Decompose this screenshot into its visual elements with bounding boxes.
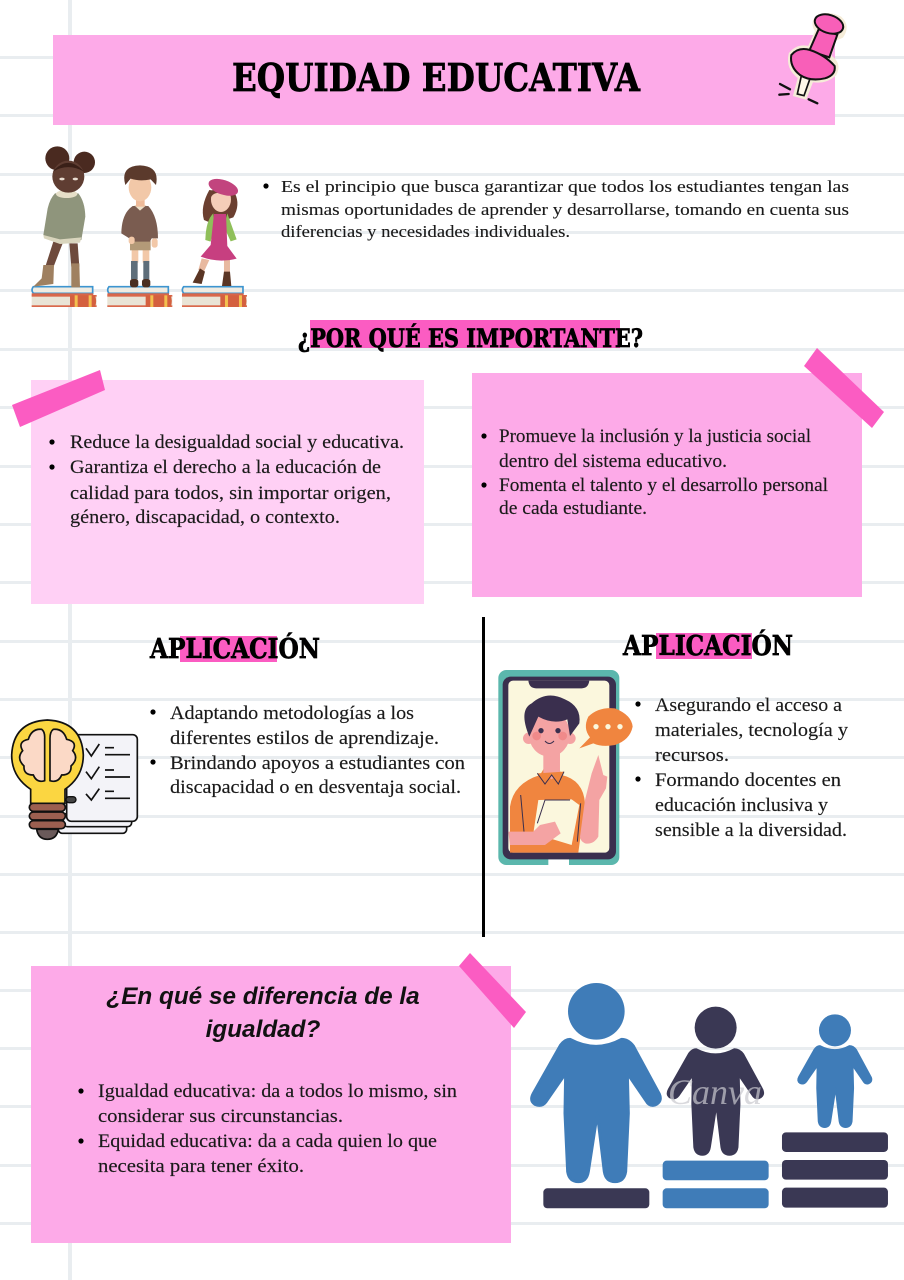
list: igualdad y equidad — [78, 1082, 457, 1177]
heading: aplicacion right: APLICACIÓN — [622, 628, 793, 662]
icon: push pin — [779, 11, 846, 103]
list: aplicacion left — [150, 704, 465, 798]
child 2 — [107, 165, 172, 307]
icon: teacher on smartphone — [498, 670, 633, 866]
heading: aplicacion left: APLICACIÓN — [149, 631, 320, 665]
list: aplicacion left: Brindando apoyos a estudiantes con — [170, 754, 465, 774]
list: reasons right: Fomenta el talento y el desarrollo personal — [499, 476, 828, 496]
figure 2 — [668, 1007, 763, 1155]
child 1 — [32, 146, 97, 307]
tape: left — [12, 370, 105, 427]
list: aplicacion right: Asegurando el acceso a — [655, 696, 842, 716]
list: reasons left: Reduce la desigualdad social y educativa. — [70, 433, 404, 453]
list: aplicacion left: diferentes estilos de aprendizaje. — [170, 729, 439, 749]
chart: figures of equity on stacked steps — [532, 983, 888, 1208]
list: aplicacion left: Adaptando metodologías a los — [170, 704, 414, 724]
panel: diferencia con la igualdad — [31, 953, 526, 1243]
intro paragraph: mismas oportunidades de aprender y desarrollarse, tomando en cuenta sus — [281, 200, 849, 219]
list: reasons right: Promueve la inclusión y la justicia social — [499, 427, 811, 447]
heading: en que se diferencia: ¿En qué se diferencia de la — [106, 983, 420, 1010]
heading: por que es importante: ¿POR QUÉ ES IMPORTANTE? — [298, 324, 643, 353]
title: EQUIDAD EDUCATIVA — [232, 55, 640, 100]
panel: importance right — [472, 348, 884, 597]
intro paragraph: Es el principio que busca garantizar que todos los estudiantes tengan las — [281, 177, 849, 196]
list: reasons left: Garantiza el derecho a la educación de — [70, 458, 381, 478]
figure 1 — [532, 983, 660, 1182]
list: reasons right — [481, 427, 828, 519]
list: aplicacion right: Formando docentes en — [655, 771, 841, 791]
list: reasons right: dentro del sistema educativo. — [499, 452, 727, 472]
panel: importance left — [12, 370, 424, 604]
list: aplicacion right: recursos. — [655, 746, 729, 766]
intro paragraph — [263, 177, 849, 241]
watermark text: Canva — [668, 1072, 762, 1112]
list: reasons left: género, discapacidad, o contexto. — [70, 508, 340, 528]
list: aplicacion right: educación inclusiva y — [655, 796, 829, 816]
list: aplicacion right — [635, 696, 849, 841]
heading: en que se diferencia: igualdad? — [206, 1016, 321, 1043]
list: aplicacion right: sensible a la diversidad. — [655, 821, 847, 841]
column divider — [482, 617, 485, 937]
heading: en que se diferencia — [106, 983, 420, 1043]
tape: right — [804, 348, 884, 428]
list: igualdad y equidad: considerar sus circunstancias. — [98, 1107, 343, 1127]
icon: light bulb with brain and checklist — [12, 720, 137, 839]
list: reasons left — [49, 433, 404, 528]
list: igualdad y equidad: necesita para tener éxito. — [98, 1157, 304, 1177]
tape: bottom — [459, 953, 526, 1028]
title banner — [53, 35, 835, 125]
list: reasons left: calidad para todos, sin importar origen, — [70, 484, 391, 504]
child 3 — [182, 176, 247, 307]
list: igualdad y equidad: Igualdad educativa: da a todos lo mismo, sin — [98, 1082, 457, 1102]
intro paragraph: diferencias y necesidades individuales. — [281, 222, 570, 241]
list: aplicacion right: materiales, tecnología y — [655, 721, 849, 741]
figure 3 — [798, 1014, 871, 1127]
list: aplicacion left: discapacidad o en desventaja social. — [170, 778, 461, 798]
illustration: three children on books — [32, 146, 247, 307]
list: reasons right: de cada estudiante. — [499, 499, 647, 519]
list: igualdad y equidad: Equidad educativa: da a cada quien lo que — [98, 1132, 437, 1152]
